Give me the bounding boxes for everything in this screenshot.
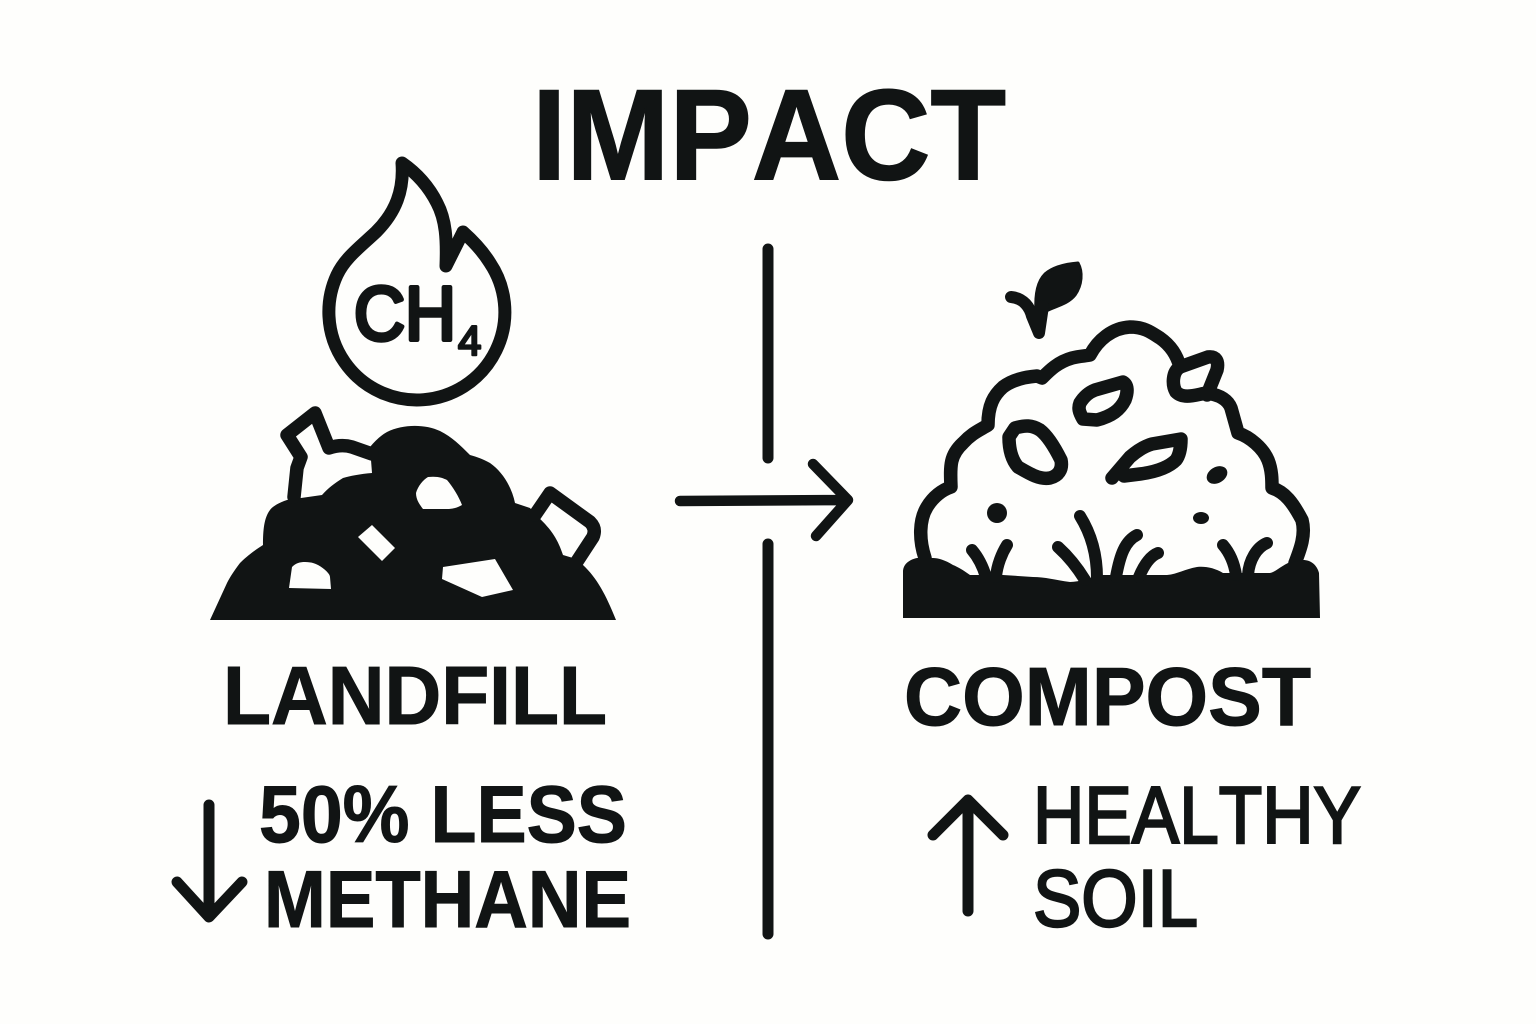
waste fragment: bottle xyxy=(287,413,372,497)
text: 50% less methane: METHANE xyxy=(264,855,631,945)
divider and arrow xyxy=(680,249,848,934)
organic pieces xyxy=(1009,382,1181,478)
heading: landfill: LANDFILL xyxy=(223,649,607,742)
text: healthy soil: HEALTHY xyxy=(1033,771,1361,861)
text: 50% less methane xyxy=(259,770,631,945)
text: 50% less methane: 50% LESS xyxy=(259,770,627,860)
text: healthy soil: SOIL xyxy=(1033,854,1198,944)
panel: landfill xyxy=(177,163,631,945)
icon: down arrow xyxy=(177,805,242,917)
soil base xyxy=(903,558,1320,618)
icon: landfill pile xyxy=(210,413,616,620)
icon: methane flame: CH xyxy=(354,272,456,357)
waste holes xyxy=(289,477,513,597)
icon: methane flame: 4 xyxy=(458,317,481,364)
icon: up arrow xyxy=(933,800,1003,911)
soil dots xyxy=(987,463,1231,524)
panel: compost xyxy=(903,263,1361,944)
grass xyxy=(972,516,1267,580)
icon: methane flame xyxy=(329,163,505,400)
heading: compost: COMPOST xyxy=(904,650,1311,743)
arrow: landfill to compost xyxy=(680,464,848,536)
text: healthy soil xyxy=(1033,771,1361,944)
leaf on pile edge xyxy=(1180,357,1218,395)
title: IMPACT xyxy=(532,63,1006,207)
icon: sprout xyxy=(1011,263,1081,333)
icon: compost pile xyxy=(903,327,1320,618)
waste fragment: box xyxy=(535,493,594,563)
